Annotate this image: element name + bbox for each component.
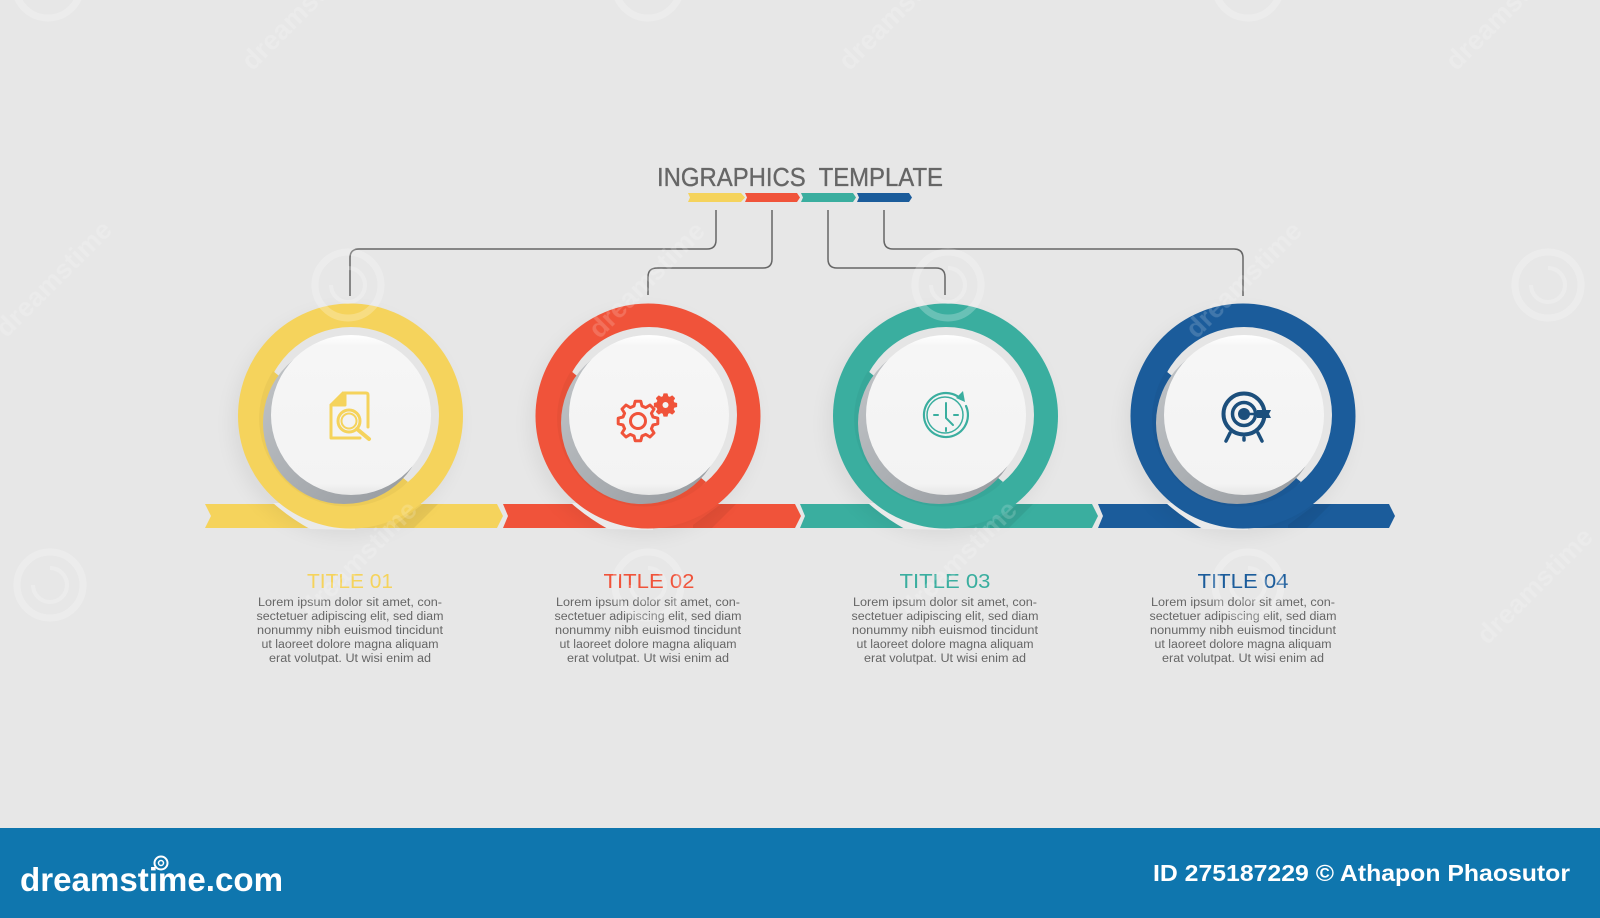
step 2: red [503, 304, 801, 665]
watermark text: dreamstime [582, 215, 711, 344]
description 4 [1150, 597, 1337, 665]
watermark text: dreamstime [1470, 521, 1599, 650]
ring 3 [828, 304, 1058, 536]
ribbon 1 [205, 504, 503, 528]
watermark text: dreamstime [894, 494, 1023, 623]
description 4: ut laoreet dolore magna aliquam [1154, 639, 1332, 651]
description 1: sectetuer adipiscing elit, sed diam [256, 611, 444, 623]
description 4: erat volutpat. Ut wisi enim ad [1162, 653, 1324, 665]
watermark text [0, 0, 1599, 650]
title 01: TITLE 01 [307, 571, 393, 593]
description 2: sectetuer adipiscing elit, sed diam [554, 611, 742, 623]
description 3: Lorem ipsum dolor sit amet, con- [853, 597, 1037, 609]
watermark text: dreamstime [1179, 215, 1308, 344]
description 4: sectetuer adipiscing elit, sed diam [1150, 611, 1336, 623]
description 1: ut laoreet dolore magna aliquam [262, 639, 438, 651]
header colour bar [688, 193, 912, 202]
ring 4 [1126, 304, 1356, 536]
ribbon 4 [1098, 504, 1395, 528]
description 2: ut laoreet dolore magna aliquam [560, 639, 736, 651]
description 4: Lorem ipsum dolor sit amet, con- [1151, 597, 1335, 609]
step 1: yellow [205, 304, 503, 665]
icon: target [1224, 394, 1271, 441]
connector lines [350, 210, 1243, 296]
watermark text: dreamstime [294, 494, 423, 623]
icon: document search [331, 393, 369, 439]
step 3: teal [800, 304, 1098, 665]
description 2: erat volutpat. Ut wisi enim ad [567, 653, 729, 665]
ring 1 [233, 304, 463, 536]
description 1: erat volutpat. Ut wisi enim ad [269, 653, 431, 665]
description 3: ut laoreet dolore magna aliquam [856, 639, 1034, 651]
title 04: TITLE 04 [1198, 571, 1288, 593]
icon: clock [924, 391, 968, 437]
icon: gears [618, 394, 677, 441]
description 1: nonummy nibh euismod tincidunt [257, 625, 444, 637]
description 1: Lorem ipsum dolor sit amet, con- [258, 597, 442, 609]
description 2: Lorem ipsum dolor sit amet, con- [556, 597, 740, 609]
description 3: sectetuer adipiscing elit, sed diam [852, 611, 1038, 623]
ribbon 2 [503, 504, 801, 528]
watermark swirls [15, 0, 1581, 618]
description 2 [554, 597, 742, 665]
title 02: TITLE 02 [604, 571, 694, 593]
step 4: blue [1098, 304, 1395, 665]
description 3: erat volutpat. Ut wisi enim ad [864, 653, 1026, 665]
description 2: nonummy nibh euismod tincidunt [555, 625, 742, 637]
title: INGRAPHICS TEMPLATE [657, 162, 943, 192]
footer logo: dreamstime.com [20, 861, 283, 898]
ring 2 [531, 304, 760, 536]
title 03: TITLE 03 [900, 571, 990, 593]
ribbon 3 [800, 504, 1098, 528]
description 3: nonummy nibh euismod tincidunt [852, 625, 1039, 637]
description 3 [852, 597, 1039, 665]
description 4: nonummy nibh euismod tincidunt [1150, 625, 1337, 637]
description 1 [256, 597, 444, 665]
footer band [0, 828, 1600, 918]
image credit: ID 275187229 © Athapon Phaosutor [1153, 860, 1570, 886]
